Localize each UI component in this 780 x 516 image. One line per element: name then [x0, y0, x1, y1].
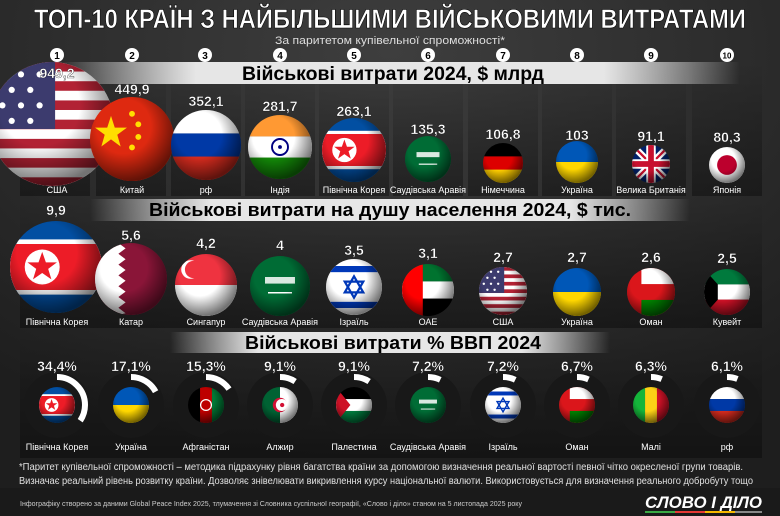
- rank numbers: 5: [351, 51, 357, 62]
- banner heading 3: [170, 332, 610, 353]
- values row 1: 106,8: [485, 126, 521, 142]
- country labels row 1: Китай: [120, 185, 144, 195]
- values row 1: 949,2: [39, 65, 75, 81]
- rank numbers: 3: [202, 51, 208, 62]
- flags row 2: [10, 221, 750, 316]
- country labels row 3: рф: [721, 442, 734, 452]
- banner heading 1: [60, 62, 740, 85]
- values row 1: 91,1: [637, 128, 665, 144]
- values row 2: 2,6: [641, 249, 661, 265]
- rank numbers: 4: [277, 51, 283, 62]
- country labels row 2: Сингапур: [187, 317, 225, 327]
- country labels row 1: [47, 185, 741, 195]
- country labels row 1: Україна: [561, 185, 593, 195]
- country labels row 2: [26, 317, 741, 327]
- rank numbers: 7: [500, 51, 506, 62]
- values row 1: 263,1: [336, 103, 372, 119]
- country labels row 1: Індія: [270, 185, 290, 195]
- flags row 1: [0, 62, 745, 187]
- banner heading 2: Військові витрати на душу населення 2024, $ тис.: [149, 200, 631, 220]
- country labels row 3: [26, 442, 734, 452]
- country labels row 2: Катар: [119, 317, 143, 327]
- values row 3: [37, 358, 744, 374]
- country labels row 2: Україна: [561, 317, 593, 327]
- values row 1: 352,1: [188, 93, 224, 109]
- country labels row 2: ОАЕ: [419, 317, 437, 327]
- values row 2: 9,9: [46, 202, 66, 218]
- values row 3: 6,3%: [635, 358, 668, 374]
- values row 3: 7,2%: [412, 358, 445, 374]
- footnote: [19, 461, 753, 487]
- values row 3: 34,4%: [37, 358, 77, 374]
- country labels row 1: рф: [200, 185, 213, 195]
- values row 2: [46, 202, 737, 266]
- panel: spending % GDP: [24, 332, 760, 452]
- rank numbers: 6: [425, 51, 431, 62]
- values row 2: 2,5: [717, 250, 737, 266]
- country labels row 1: Північна Корея: [323, 185, 385, 195]
- values row 1: 281,7: [262, 98, 298, 114]
- country labels row 2: Ізраїль: [339, 317, 369, 327]
- banner heading 1: Військові витрати 2024, $ млрд: [242, 64, 544, 85]
- country labels row 3: Україна: [115, 442, 147, 452]
- country labels row 1: Велика Британія: [616, 185, 686, 195]
- rank numbers: 2: [129, 51, 135, 62]
- values row 2: 4: [276, 237, 284, 253]
- source text: Інфографіку створено за даними Global Peace Index 2025, тлумачення зі Словника суспільної географії, «Слово і діло» станом на 5 листопада 2025 року: [20, 499, 522, 508]
- country labels row 2: Кувейт: [713, 317, 741, 327]
- country labels row 2: США: [493, 317, 513, 327]
- values row 2: 4,2: [196, 235, 216, 251]
- values row 2: 2,7: [567, 249, 587, 265]
- values row 3: 17,1%: [111, 358, 151, 374]
- country labels row 2: Саудівська Аравія: [242, 317, 318, 327]
- values row 3: 6,7%: [561, 358, 594, 374]
- values row 3: 9,1%: [338, 358, 371, 374]
- values row 1: 80,3: [713, 129, 741, 145]
- values row 2: 2,7: [493, 249, 513, 265]
- country labels row 3: Афганістан: [182, 442, 230, 452]
- country labels row 2: Оман: [639, 317, 663, 327]
- subtitle: За паритетом купівельної спроможності*: [275, 35, 506, 47]
- values row 3: 15,3%: [186, 358, 226, 374]
- country labels row 3: Алжир: [266, 442, 294, 452]
- values row 2: 3,5: [344, 242, 364, 258]
- rank numbers: 1: [54, 51, 60, 62]
- country labels row 3: Оман: [565, 442, 589, 452]
- rank numbers: 9: [648, 51, 654, 62]
- country labels row 2: Північна Корея: [26, 317, 88, 327]
- rank numbers: [50, 48, 734, 62]
- values row 2: 3,1: [418, 245, 438, 261]
- rank numbers: 10: [723, 52, 732, 60]
- banner heading 2: [90, 199, 690, 221]
- panel: military spending 2024: [0, 62, 745, 195]
- values row 1: 449,9: [114, 81, 150, 97]
- values row 1: 135,3: [410, 121, 446, 137]
- country labels row 3: Північна Корея: [26, 442, 88, 452]
- logo: СЛОВО І ДІЛО: [645, 493, 762, 512]
- rank numbers: 8: [574, 51, 580, 62]
- country labels row 1: Японія: [713, 185, 741, 195]
- values row 2: 5,6: [121, 227, 141, 243]
- country labels row 3: Саудівська Аравія: [390, 442, 466, 452]
- values row 3: 6,1%: [711, 358, 744, 374]
- values row 1: 103: [565, 127, 589, 143]
- country labels row 1: Саудівська Аравія: [390, 185, 466, 195]
- country labels row 3: Палестина: [331, 442, 377, 452]
- banner heading 3: Військові витрати % ВВП 2024: [245, 333, 541, 353]
- values row 3: 7,2%: [487, 358, 520, 374]
- values row 1: [39, 65, 741, 145]
- country labels row 3: Ізраїль: [488, 442, 518, 452]
- country labels row 3: Малі: [641, 442, 661, 452]
- country labels row 1: США: [47, 185, 67, 195]
- country labels row 1: Німеччина: [481, 185, 525, 195]
- values row 3: 9,1%: [264, 358, 297, 374]
- footnote: *Паритет купівельної спроможності – методика підрахунку рівня багатства країни за допомогою визначення реальної вартості певної чітко окресленої групи товарів.: [19, 461, 743, 473]
- ring charts: [39, 372, 745, 423]
- panel: per capita spending: [10, 199, 750, 327]
